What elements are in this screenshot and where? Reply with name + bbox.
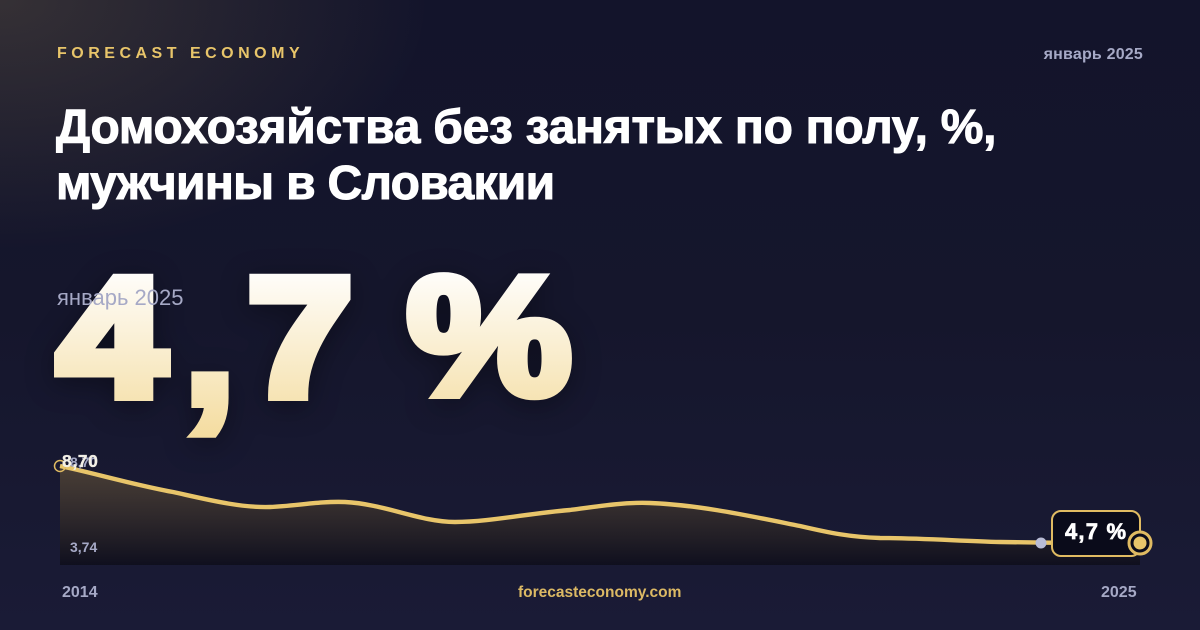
callout box [1052, 511, 1140, 556]
min label: 3,74 [70, 539, 97, 555]
start year: 2014 [62, 584, 98, 601]
big value: , [181, 230, 238, 445]
title: мужчины в Словакии [56, 157, 554, 210]
source url: forecasteconomy.com [518, 584, 681, 601]
value date: январь 2025 [57, 285, 184, 310]
header date: январь 2025 [1044, 46, 1143, 63]
big value: 7 [248, 243, 352, 431]
end year: 2025 [1101, 584, 1137, 601]
brand label: FORECAST ECONOMY [57, 45, 304, 62]
big value: 4 [58, 245, 165, 431]
end marker [1129, 532, 1151, 554]
max label shadow: 8,70 [70, 454, 97, 470]
title: Домохозяйства без занятых по полу, %, [56, 101, 996, 154]
penultimate marker [1036, 538, 1046, 548]
trend line [60, 466, 1140, 544]
max label: 8,70 [62, 451, 98, 471]
callout value: 4,7 % [1065, 519, 1127, 544]
area fill [60, 466, 1140, 565]
start marker [54, 460, 66, 472]
title [56, 101, 996, 210]
big value: % [407, 243, 571, 430]
